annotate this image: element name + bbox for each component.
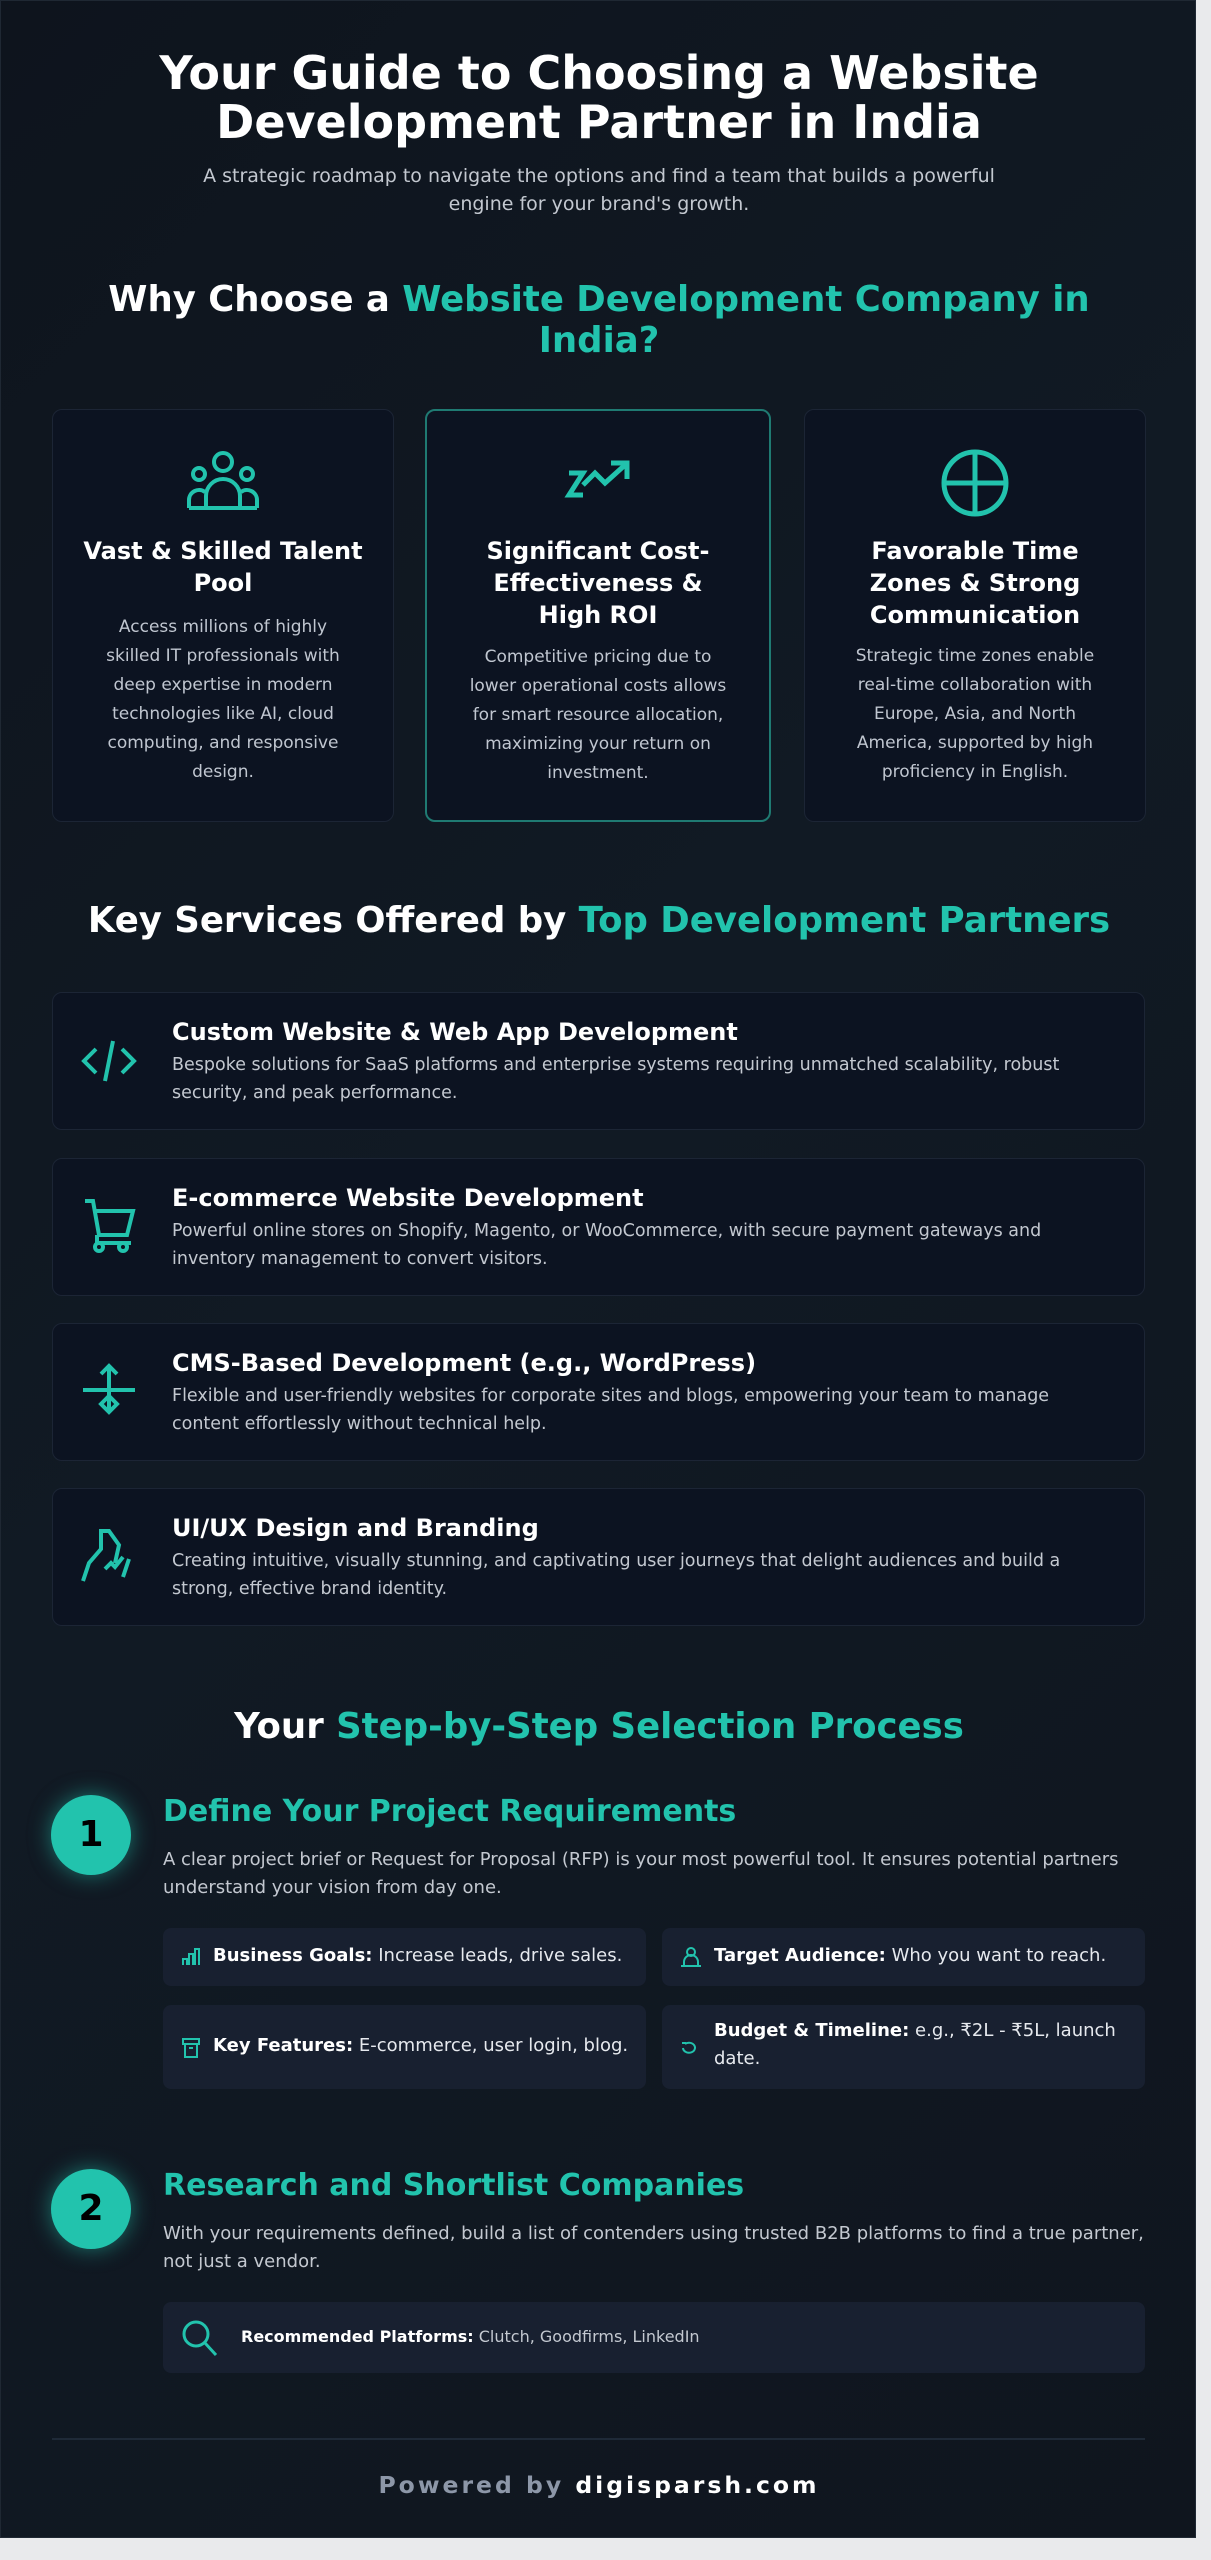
box: budget: Budget & Timeline: e.g., ₹2L - ₹5L, launch date. [714,2020,1116,2069]
step 1 title: Define Your Project Requirements [163,1794,736,1829]
box: key features: Key Features: E-commerce, user login, blog. [213,2035,628,2056]
service: custom: Custom Website & Web App Development [172,1018,738,1046]
title: Development Partner in India [216,95,982,149]
title: Your Guide to Choosing a Website [159,46,1039,100]
service: ecommerce [52,1158,1145,1296]
card: talent pool [52,409,394,822]
step 1 badge [51,1795,131,1875]
icon: people [187,451,259,510]
box: target audience [662,1928,1145,1986]
card: cost: Significant Cost-Effectiveness & High ROI [487,537,709,629]
subtitle: A strategic roadmap to navigate the options and find a team that builds a powerful engine for your brand's growth. [203,165,995,215]
service: cms [52,1323,1145,1461]
heading: key services: Key Services Offered by Top Development Partners [88,900,1110,941]
card: time zones: Favorable Time Zones & Strong Communication [870,537,1080,629]
icon: trend [564,460,630,498]
title [159,46,1039,149]
service: uiux: Creating intuitive, visually stunning, and captivating user journeys that delight audiences and build a strong, effective brand identity. [172,1551,1060,1599]
card: cost: Competitive pricing due to lower operational costs allows for smart resource allocation, maximizing your return on investment. [470,647,726,783]
card: talent pool: Access millions of highly skilled IT professionals with deep expertise in modern technologies like AI, cloud computing, and responsive design. [106,617,340,782]
box: business goals: Business Goals: Increase leads, drive sales. [213,1945,622,1966]
card: cost [425,409,771,822]
card: talent pool: Vast & Skilled Talent Pool [83,537,363,597]
icon: globe [942,450,1008,516]
icon: code [81,1040,137,1082]
box: platforms: Recommended Platforms: Clutch, Goodfirms, LinkedIn [241,2327,700,2346]
box: key features [163,2005,646,2089]
step 2 title: Research and Shortlist Companies [163,2168,744,2203]
step 2 badge [51,2169,131,2249]
service: ecommerce: E-commerce Website Development [172,1184,644,1212]
service: uiux [52,1488,1145,1626]
card: time zones: Strategic time zones enable real-time collaboration with Europe, Asia, and North America, supported by high proficiency in English. [856,646,1094,782]
service: custom [52,992,1145,1130]
step 2 description: With your requirements defined, build a list of contenders using trusted B2B platforms to find a true partner, not just a vendor. [163,2223,1144,2272]
heading: process: Your Step-by-Step Selection Process [234,1706,964,1747]
service: ecommerce: Powerful online stores on Shopify, Magento, or WooCommerce, with secure payment gateways and inventory management to convert visitors. [172,1221,1041,1269]
box: target audience: Target Audience: Who you want to reach. [714,1945,1106,1966]
icon: cms [83,1363,135,1415]
step 1 badge: 1 [78,1814,104,1855]
box: budget [662,2005,1145,2089]
service: uiux: UI/UX Design and Branding [172,1514,539,1542]
box: platforms [163,2302,1145,2373]
icon: hand [81,1529,131,1582]
box: business goals [163,1928,646,1986]
step 1 description: A clear project brief or Request for Proposal (RFP) is your most powerful tool. It ensures potential partners understand your vision from day one. [163,1849,1118,1898]
service: cms: CMS-Based Development (e.g., WordPress) [172,1349,756,1377]
step 2 badge: 2 [78,2188,104,2229]
service: custom: Bespoke solutions for SaaS platforms and enterprise systems requiring unmatched scalability, robust security, and peak performance. [172,1055,1059,1103]
icon: cart [85,1199,136,1253]
heading: why choose: Why Choose a Website Development Company in India? [108,279,1090,361]
footer: Powered by digisparsh.com [378,2471,820,2499]
service: cms: Flexible and user-friendly websites for corporate sites and blogs, empowering your team to manage content effortlessly without technical help. [172,1386,1049,1434]
card: time zones [804,409,1146,822]
